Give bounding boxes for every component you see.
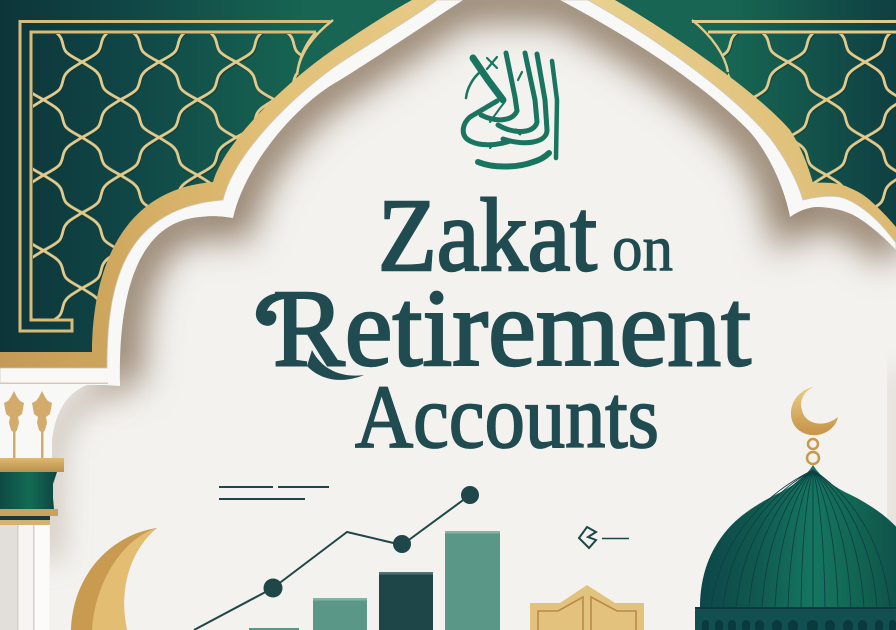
heading: Zakat on: Zakat — [378, 178, 597, 293]
icon: gold gate — [530, 585, 644, 630]
icon: mosque dome — [695, 387, 896, 630]
dome ribs — [711, 470, 890, 608]
icon: gold crescent moon — [71, 528, 157, 630]
heading: Retirement: Retirement — [273, 267, 751, 389]
heading: Accounts: Accounts — [355, 368, 659, 467]
panel: right lattice frame — [692, 20, 896, 250]
line chart — [194, 486, 479, 630]
icon: small diamond mark — [579, 527, 629, 548]
icon: gold finials on column — [4, 391, 52, 458]
decorative text lines — [219, 486, 329, 500]
dome drum — [695, 608, 896, 630]
crescent finial — [791, 387, 838, 435]
title — [256, 178, 751, 467]
bar — [445, 531, 500, 630]
bar — [379, 572, 433, 630]
icon: Arabic calligraphy emblem — [463, 53, 557, 167]
green arch spandrel background — [0, 0, 896, 370]
dome body — [700, 465, 896, 608]
panel: left lattice frame — [20, 20, 333, 331]
heading: Zakat on: on — [612, 212, 673, 285]
bar — [313, 598, 367, 630]
bar chart — [249, 531, 500, 630]
column capital — [0, 382, 120, 460]
column — [0, 458, 64, 630]
bar — [249, 628, 299, 630]
